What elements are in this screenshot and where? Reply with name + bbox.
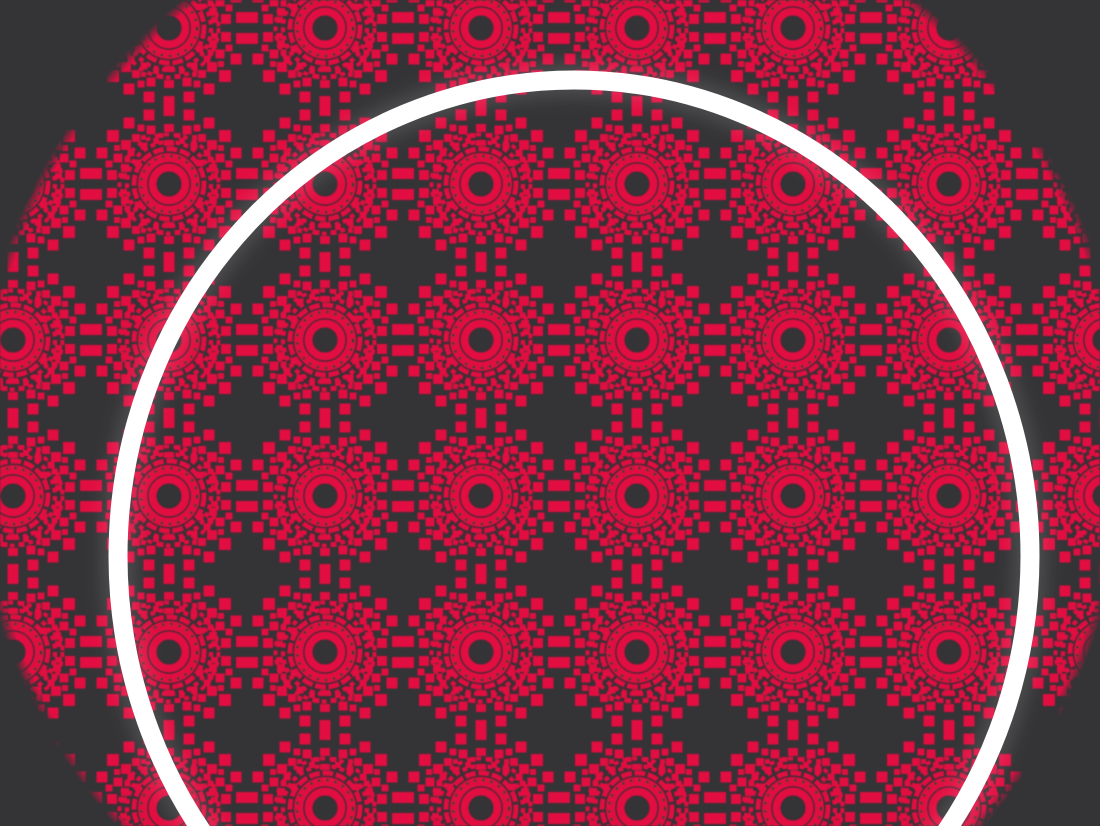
soft glow around ring: [118, 80, 1030, 826]
white ring: [118, 80, 1030, 826]
